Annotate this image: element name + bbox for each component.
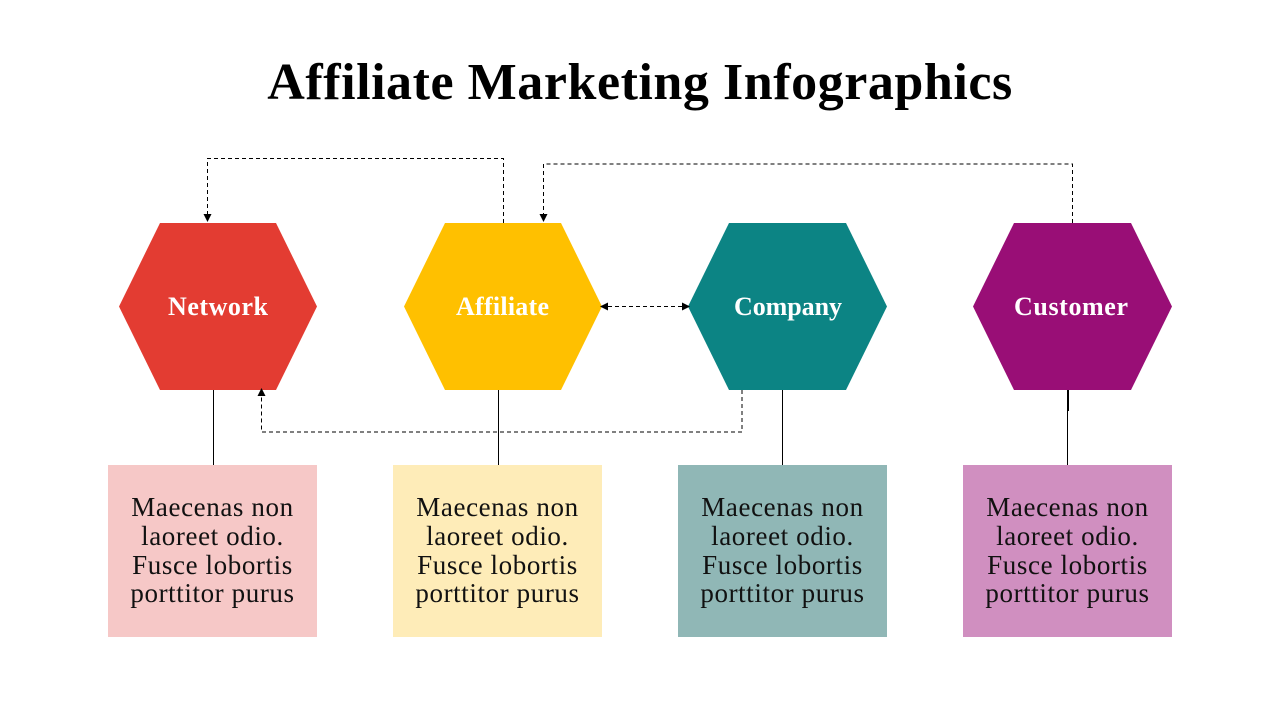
- text box: customer: laoreet odio.: [996, 521, 1139, 551]
- text box: network: Maecenas non: [131, 492, 294, 522]
- arrow: affiliate and company: [601, 306, 689, 308]
- text box: customer: porttitor purus: [985, 578, 1150, 608]
- hexagon: network: [119, 223, 317, 390]
- arrow: customer to affiliate: [544, 164, 1072, 223]
- text box: company: Maecenas non: [701, 492, 864, 522]
- text box: affiliate: Fusce lobortis: [417, 550, 578, 580]
- hexagon: customer: Customer: [1014, 292, 1128, 321]
- text box: network: laoreet odio.: [141, 521, 284, 551]
- hexagon: company: Company: [734, 292, 842, 321]
- text box: network: [108, 465, 317, 637]
- text box: affiliate: laoreet odio.: [426, 521, 569, 551]
- text box: customer: Maecenas non: [986, 492, 1149, 522]
- hexagon: network: Network: [168, 292, 269, 321]
- hexagon: affiliate: Affiliate: [456, 292, 549, 321]
- connector: affiliate to box: [498, 390, 500, 465]
- text box: network: porttitor purus: [130, 578, 295, 608]
- text box: affiliate: Maecenas non: [416, 492, 579, 522]
- connector: customer to box: [1068, 390, 1069, 465]
- text box: company: porttitor purus: [700, 578, 865, 608]
- text box: customer: Fusce lobortis: [987, 550, 1148, 580]
- text box: customer: [963, 465, 1172, 637]
- arrow: affiliate to network: [208, 158, 504, 223]
- hexagon: affiliate: [404, 223, 602, 390]
- text box: company: [678, 465, 887, 637]
- text box: company: Fusce lobortis: [702, 550, 863, 580]
- hexagon: customer: [973, 223, 1172, 390]
- text box: affiliate: porttitor purus: [415, 578, 580, 608]
- text box: company: laoreet odio.: [711, 521, 854, 551]
- arrow: company to network: [262, 389, 742, 432]
- title: Affiliate Marketing Infographics: [267, 54, 1013, 111]
- text box: network: Fusce lobortis: [132, 550, 293, 580]
- connector: network to box: [212, 390, 214, 465]
- hexagon: company: [688, 223, 887, 390]
- connector: company to box: [782, 390, 784, 465]
- text box: affiliate: [393, 465, 602, 637]
